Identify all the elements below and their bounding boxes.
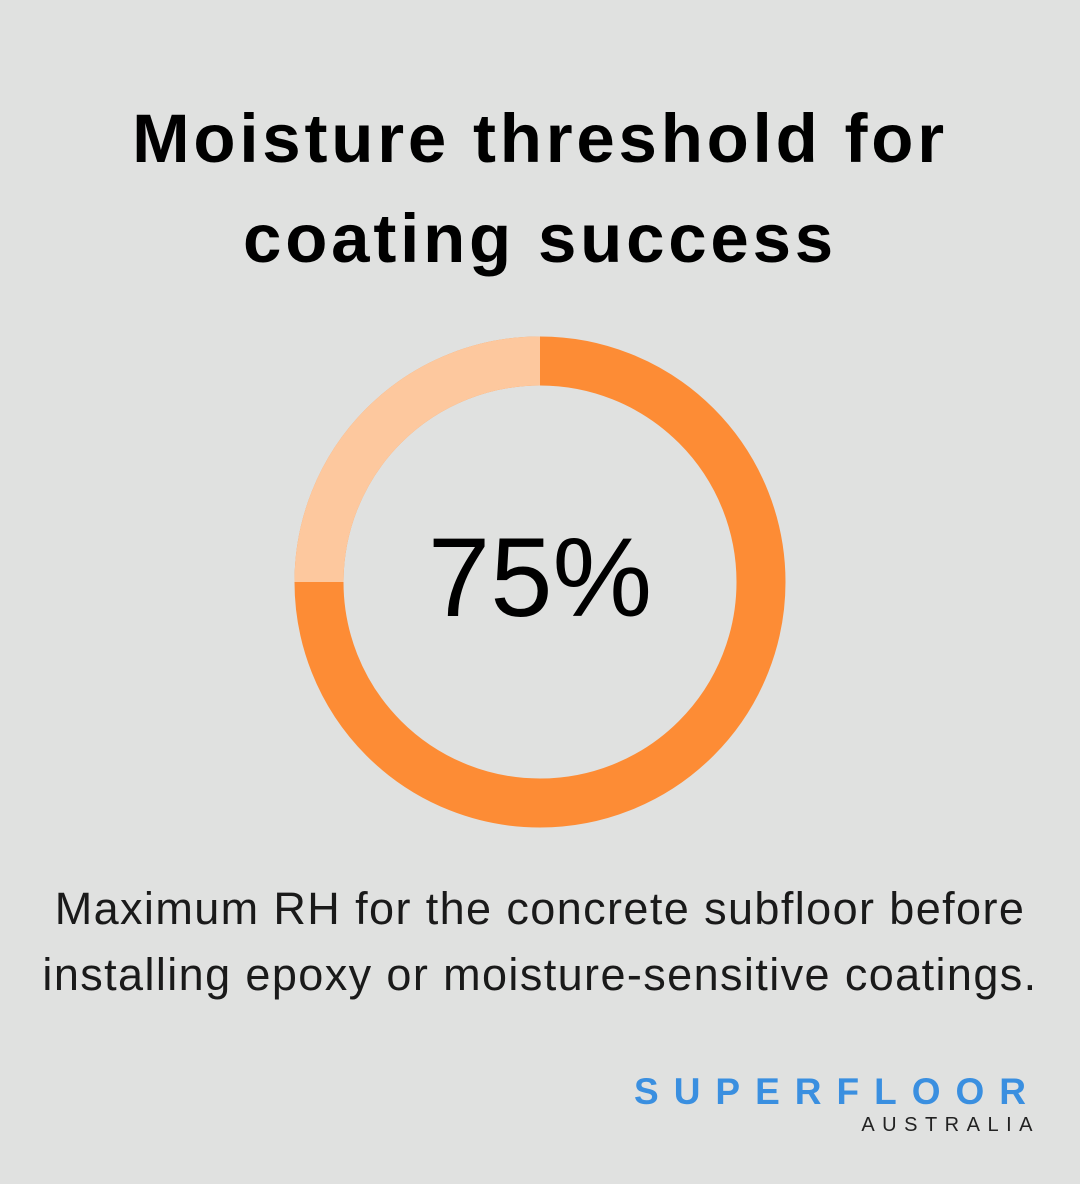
caption: Maximum RH for the concrete subfloor before: [55, 883, 1025, 934]
logo: [634, 1071, 1041, 1136]
logo: AUSTRALIA: [861, 1114, 1040, 1136]
title: coating success: [243, 200, 837, 277]
title: Moisture threshold for: [132, 100, 948, 177]
donut chart: 75%: [428, 515, 652, 640]
caption: [42, 883, 1038, 1000]
caption: installing epoxy or moisture-sensitive coatings.: [42, 949, 1038, 1000]
logo: SUPERFLOOR: [634, 1071, 1041, 1112]
title: [132, 100, 948, 277]
